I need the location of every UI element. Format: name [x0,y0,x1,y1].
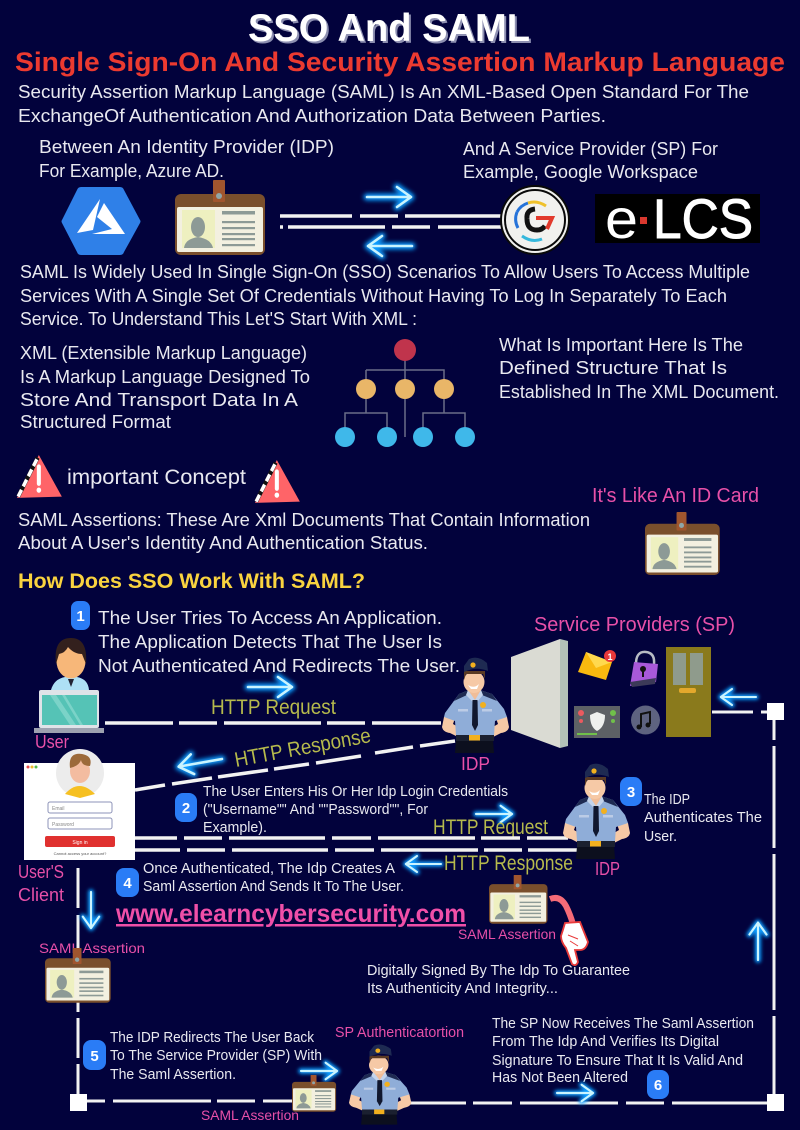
arrow: response from IDP [406,856,441,872]
label: HTTP request 2: HTTP Request [433,816,548,839]
step 2 badge [175,793,197,822]
ID card caption: It's Like An ID Card [592,485,759,507]
step 4 text [143,860,404,895]
arrow: to SP [301,1063,337,1079]
icon: notification envelope: 1 [607,652,613,662]
label: user: User [35,732,69,752]
step 5 text: The Saml Assertion. [110,1066,236,1083]
icon: door [666,647,711,737]
XML definition [20,343,310,432]
icon: pointing hand [550,898,588,965]
step 5 text [110,1029,322,1083]
step 6 badge [647,1070,669,1099]
icon: ID card small [645,512,720,575]
service provider text: And A Service Provider (SP) For [463,139,718,159]
step 6 text: Signature To Ensure That It Is Valid And [492,1052,743,1069]
SSO paragraph: Services With A Single Set Of Credentials Without Having To Log In Separately To Each [20,286,727,306]
digitally signed text: Digitally Signed By The Idp To Guarantee [367,962,630,979]
label: IDP 2: IDP [595,859,620,879]
step 5 badge [83,1040,106,1070]
SSO paragraph: Service. To Understand This Let'S Start With XML : [20,309,417,329]
intro paragraph: ExchangeOf Authentication And Authorization Data Between Parties. [18,106,606,126]
police: SP [349,1045,411,1125]
connection lines [280,216,502,227]
user's client login window [24,749,135,860]
wall [511,639,568,748]
icon: ID card [175,180,265,255]
step 5 text: The IDP Redirects The User Back [110,1029,314,1046]
SSO paragraph: SAML Is Widely Used In Single Sign-On (SSO) Scenarios To Allow Users To Access Multiple [20,262,750,282]
heading: important concept: important Concept [67,466,246,489]
icon: SAML card at IDP [489,875,548,924]
digitally signed text: Its Authenticity And Integrity... [367,980,558,997]
step 5 badge: 5 [90,1048,99,1065]
step 2 text: The User Enters His Or Her Idp Login Credentials [203,783,508,800]
icon: music disc [631,706,660,734]
label: HTTP request: HTTP Request [211,696,336,719]
diagram: XML tree [335,339,475,447]
XML definition: Is A Markup Language Designed To [20,367,310,387]
label: HTTP response: HTTP Response [233,724,373,772]
arrow: to bottom right [557,1085,593,1101]
SAML assertions text: SAML Assertions: These Are Xml Documents That Contain Information [18,510,590,530]
SAML assertions text: About A User's Identity And Authentication Status. [18,533,428,553]
website link: www.elearncybersecurity.com [115,900,466,928]
step 6 text: Has Not Been Altered [492,1069,628,1086]
label: user's client: Client [18,885,64,905]
step 6 text: The SP Now Receives The Saml Assertion [492,1015,754,1032]
user's client login window: Password [52,822,74,828]
XML structure note [499,335,779,402]
SAML assertions text [18,510,590,553]
step 3 text [644,791,762,845]
icon: warning left [17,455,62,498]
title: SSO And SAML [248,7,530,50]
step 6 text: From The Idp And Verifies Its Digital [492,1033,719,1050]
icon: security panel [574,706,620,738]
step 6 text [492,1015,754,1086]
XML definition: Store And Transport Data In A [20,390,298,410]
service provider text [463,139,718,182]
icon: SAML card bottom [292,1075,336,1112]
XML definition: Structured Format [20,412,171,432]
icon: Azure hexagon [62,187,140,255]
step 4 badge [116,868,139,897]
label: SP authentication: SP Authenticatortion [335,1024,464,1041]
step 2 text: ("Username"" And ""Password"", For [203,801,428,818]
step 1 text [98,608,460,676]
step 3 text: The IDP [644,791,690,808]
step 1 text: The Application Detects That The User Is [98,632,442,652]
step 1 badge [71,601,90,630]
icon: padlock [630,652,658,687]
step 1 text: The User Tries To Access An Application. [98,608,442,628]
arrow: HTTP response [177,749,224,776]
node: top right [767,703,784,720]
request line [105,721,441,725]
label: HTTP response 2: HTTP Response [444,852,573,875]
label: user's client: User'S [18,862,64,882]
arrow: HTTP request [248,677,292,697]
step 3 text: Authenticates The [644,809,762,826]
icon: SAML card left [45,948,111,1003]
digitally signed text [367,962,630,997]
XML structure note: Established In The XML Document. [499,382,779,402]
main flow lines [78,712,774,1103]
step 6 badge: 6 [654,1077,662,1094]
user's client login window: Sign in [72,840,88,846]
label: SAML assertion left: SAML Assertion [39,940,145,956]
logo: e-LCS: e [605,187,638,250]
subtitle: Single Sign-On And Security Assertion Markup Language [15,47,785,77]
step 3 text: User. [644,828,677,845]
label: SAML assertion bottom: SAML Assertion [201,1107,299,1123]
arrow: to identity provider [368,236,412,256]
step 2 text [203,783,508,836]
label: user's client [18,862,64,905]
intro paragraph: Security Assertion Markup Language (SAML) Is An XML-Based Open Standard For The [18,82,749,102]
response line [135,741,455,790]
step 4 badge: 4 [123,875,132,892]
step 2 badge: 2 [182,800,190,817]
double lines to IDP [135,838,582,850]
service providers label: Service Providers (SP) [534,614,735,636]
step 1 text: Not Authenticated And Redirects The User. [98,656,460,676]
arrow: up [750,923,766,960]
node: bottom right [767,1094,784,1111]
arrow: down [83,892,99,928]
arrow: to service provider [367,187,411,207]
step 2 text: Example). [203,819,267,836]
icon: user with laptop [34,638,104,733]
service provider text: Example, Google Workspace [463,162,698,182]
XML structure note: Defined Structure That Is [499,358,727,378]
SSO paragraph [20,262,750,329]
user's client login window: Email [52,806,65,812]
label: IDP: IDP [461,754,490,774]
step 3 badge [620,777,642,806]
step 3 badge: 3 [627,784,635,801]
step 5 text: To The Service Provider (SP) With [110,1047,322,1064]
XML structure note: What Is Important Here Is The [499,335,743,355]
logo: e-LCS [595,187,760,250]
user's client login window: Cannot access your account? [54,851,107,856]
identity provider text: For Example, Azure AD. [39,161,224,181]
police: IDP [442,658,509,753]
icon: notification envelope [578,650,616,680]
arrow: into door [721,689,756,705]
step 1 badge: 1 [76,608,85,625]
label: SAML assertion mid: SAML Assertion [458,926,556,942]
XML definition: XML (Extensible Markup Language) [20,343,307,363]
step 4 text: Saml Assertion And Sends It To The User. [143,878,404,895]
identity provider text: Between An Identity Provider (IDP) [39,137,334,157]
logo: e-LCS: LCS [653,187,753,250]
police: IDP authenticates [563,764,630,859]
arrow: request to IDP [476,806,512,822]
identity provider text [39,137,334,181]
step 4 text: Once Authenticated, The Idp Creates A [143,860,395,877]
node: bottom left [70,1094,87,1111]
intro paragraph [18,82,749,126]
icon: Google logo [501,186,569,254]
icon: warning right [255,460,300,503]
heading: how does SSO work: How Does SSO Work With SAML? [18,570,365,593]
